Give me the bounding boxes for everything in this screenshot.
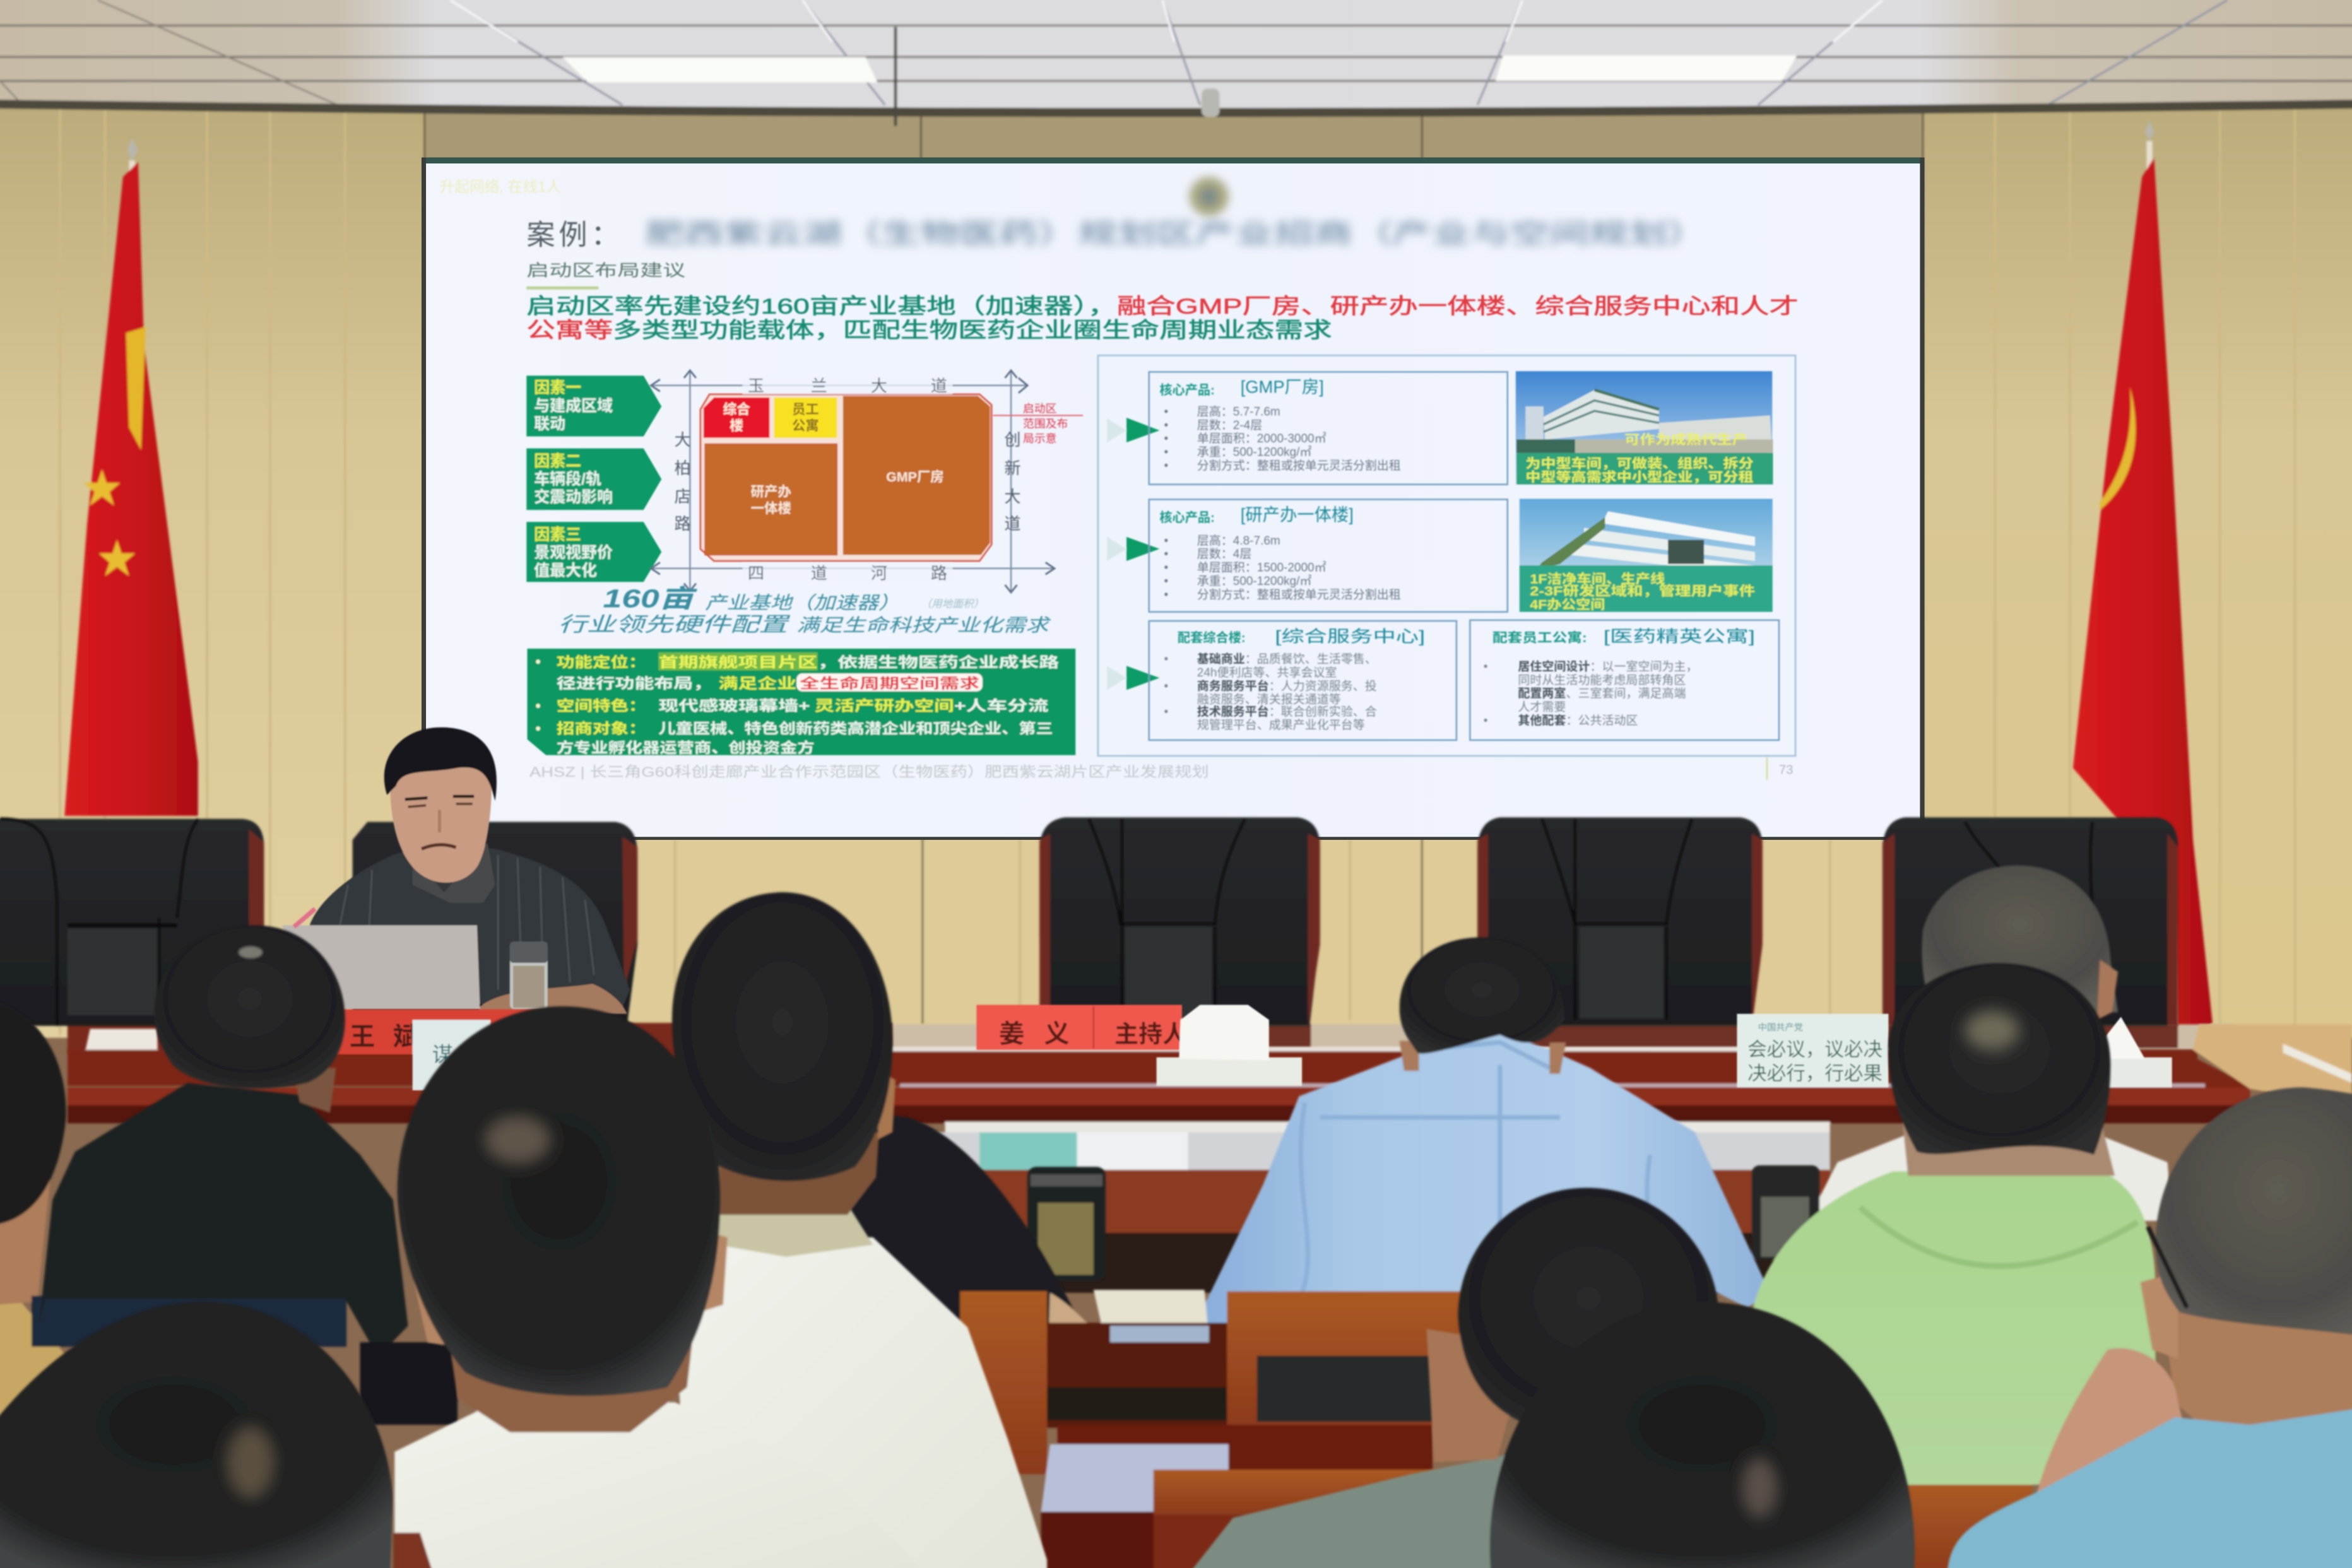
- card: R&D office building: 分割方式：整租或按单元灵活分割出租: [1197, 587, 1401, 601]
- card: staff apartment: •: [1484, 714, 1487, 728]
- name plate: Wang Bin: [331, 1010, 545, 1054]
- presenter face: [390, 750, 492, 883]
- card: R&D office building: •: [1164, 562, 1168, 575]
- card: service centre: •: [1164, 653, 1168, 666]
- card: staff apartment: 配套员工公寓:: [1492, 630, 1587, 645]
- green summary panel: 方专业孵化器运营商、创投资金方: [557, 740, 815, 756]
- card: service centre: •: [1164, 705, 1168, 719]
- site plan map: 综合: [723, 402, 750, 417]
- paper on table: [86, 1029, 158, 1050]
- factor tag three: [526, 522, 661, 582]
- man far left: [0, 994, 68, 1485]
- green summary panel: [528, 649, 1075, 756]
- card: GMP plant: 层高：5.7-7.6m: [1197, 404, 1280, 418]
- glass reflection: [915, 1133, 1830, 1170]
- chair front left: [820, 1473, 1007, 1568]
- card: service centre: 基础商业：品质餐饮、生活零售、: [1197, 652, 1377, 666]
- factor tag one: [526, 375, 661, 437]
- chair front centre: [1154, 1470, 2033, 1568]
- card: R&D office building: [研产办一体楼]: [1241, 505, 1354, 524]
- audience back rows: [0, 865, 2172, 1568]
- man in blue shirt: [1205, 938, 1770, 1354]
- card: service centre: 规管理平台、成果产业化平台等: [1197, 718, 1365, 732]
- card: GMP plant: 承重：500-1200kg/㎡: [1197, 445, 1311, 459]
- name plate: Wang Bin: 王 斌: [350, 1022, 418, 1051]
- slide headline: 启动区率先建设约160亩产业基地（加速器）， 融合GMP厂房、研产办一体楼、综合服务中心和人才: [526, 295, 1799, 319]
- site plan map: 河: [871, 563, 887, 582]
- site plan map: 路: [674, 514, 691, 533]
- room background: [0, 0, 2352, 1044]
- chair behind blue shirt: [1227, 1291, 1465, 1426]
- man with glasses on right: [1947, 1087, 2352, 1568]
- ceiling sensor: [1202, 88, 1219, 117]
- green summary panel: 灵活产研办空间: [815, 698, 954, 714]
- factor tag two: 交震动影响: [534, 488, 613, 506]
- presenter collar: [413, 843, 495, 903]
- card: service centre: 技术服务平台：联合创新实验、合: [1197, 704, 1377, 719]
- ceiling hanging rod: [895, 27, 896, 126]
- slogan card left: 谋: [432, 1044, 453, 1067]
- slogan card right: 会必议，议必决: [1747, 1038, 1882, 1060]
- ceiling: [0, 0, 2352, 108]
- green summary panel: 首期旗舰项目片区: [658, 654, 817, 671]
- card: GMP plant: •: [1164, 459, 1168, 473]
- site plan map: 道: [1004, 514, 1020, 533]
- page number: [1767, 757, 1793, 780]
- blurred title text: 肥西紫云湖（生物医药）规划区产业招商（产业与空间规划）: [645, 219, 1707, 249]
- card: GMP plant: •: [1164, 419, 1168, 432]
- slogan card right: 中国共产党: [1758, 1022, 1803, 1033]
- site plan map: 公寓: [792, 418, 819, 433]
- card: R&D office building: [1149, 499, 1508, 612]
- card: R&D office building: 层高：4.8-7.6m: [1197, 534, 1280, 548]
- chair beside white shirt: [960, 1291, 1047, 1474]
- site area caption: 160亩: [603, 584, 698, 613]
- card: service centre: 融资服务、清关报关通道等: [1197, 693, 1341, 707]
- wall under screen: [60, 108, 2295, 1044]
- table back surface: [68, 1023, 2235, 1053]
- card: GMP plant: 分割方式：整租或按单元灵活分割出租: [1197, 459, 1401, 473]
- site area caption: 产业基地（加速器）: [705, 593, 900, 613]
- projection screen: [422, 158, 1925, 840]
- card: GMP plant: •: [1164, 405, 1168, 418]
- slide subtitle: 启动区布局建议: [526, 261, 685, 280]
- name plate: centre: [976, 1005, 1186, 1050]
- photo: GMP building: 为中型车间，可做装、组织、拆分: [1525, 456, 1754, 471]
- green summary panel: ，依据生物医药企业成长路: [817, 654, 1059, 671]
- pink pen: [294, 909, 315, 927]
- site plan map: 大: [871, 376, 887, 395]
- card: R&D office building: •: [1164, 575, 1168, 588]
- card: staff apartment: [1470, 620, 1779, 740]
- factor tag one: 因素一: [534, 379, 581, 397]
- chair centre: [1039, 817, 1320, 1026]
- card: GMP plant: •: [1164, 432, 1168, 445]
- factor tag two: [526, 449, 661, 510]
- slide headline: [526, 295, 1799, 343]
- card: service centre: 配套综合楼:: [1178, 630, 1246, 645]
- slogan card right: 决必行，行必果: [1747, 1062, 1882, 1084]
- ceiling lights: [562, 56, 1797, 83]
- slide watermark: 升起网络, 在线1人: [439, 179, 561, 196]
- slogan card right: [1737, 1014, 1889, 1087]
- site plan map: 路: [931, 563, 947, 582]
- card: R&D office building: 承重：500-1200kg/㎡: [1197, 574, 1311, 588]
- card: service centre: •: [1164, 680, 1168, 693]
- leather chairs: [0, 817, 2178, 1026]
- factor tag two: 车辆段/轨: [534, 470, 601, 488]
- man in dark shirt: [840, 1110, 1113, 1388]
- man with spiky hair: [394, 1006, 927, 1568]
- page number: 73: [1779, 763, 1793, 777]
- man in front centre: [1490, 1302, 1915, 1568]
- card: GMP plant: •: [1164, 446, 1168, 459]
- chair stub: [393, 1533, 434, 1568]
- wood chairs: [820, 1291, 2033, 1568]
- chair far right: [1882, 817, 2178, 1026]
- factor tag three: 景观视野价: [534, 544, 613, 562]
- man with grey hair: [1807, 865, 2172, 1221]
- factor tag two: 因素二: [534, 452, 581, 470]
- site area caption: （用地面积）: [921, 598, 984, 610]
- presenter torso: [309, 844, 630, 1008]
- green summary panel: 满足企业: [719, 675, 796, 692]
- card: staff apartment: 居住空间设计：以一室空间为主，: [1518, 659, 1698, 673]
- rear desk and papers: [1047, 1290, 1234, 1428]
- card: R&D office building: 核心产品:: [1159, 510, 1215, 525]
- card: service centre: 24h便利店等、共享会议室: [1197, 666, 1337, 680]
- card: staff apartment: 同时从生活功能考虑局部转角区: [1518, 673, 1686, 687]
- site plan map: [651, 370, 1083, 592]
- card: R&D office building: •: [1164, 548, 1168, 561]
- tissue box right: [2103, 1017, 2172, 1087]
- photo: terraced building: 1F洁净车间、生产线: [1530, 572, 1665, 587]
- card: R&D office building: 单层面积：1500-2000㎡: [1197, 560, 1327, 575]
- left flag: [64, 138, 198, 816]
- slide right outer frame: [1098, 355, 1795, 756]
- green summary panel: •: [536, 720, 541, 736]
- man in black shirt: [32, 926, 458, 1425]
- left wood wall: [0, 108, 425, 1038]
- site area caption: [558, 584, 1051, 636]
- site area caption: 满足生命科技产业化需求: [796, 616, 1051, 636]
- site plan map: 新: [1004, 459, 1020, 478]
- card: GMP plant: 层数：2-4层: [1197, 418, 1262, 432]
- card: R&D office building: •: [1164, 534, 1168, 548]
- site plan map: 员工: [792, 402, 819, 417]
- site plan map: 道: [931, 376, 947, 395]
- chair far left: [0, 819, 264, 1026]
- slogan card left: [413, 1020, 490, 1090]
- flask right: [1752, 1165, 1819, 1260]
- green summary panel: 径进行功能布局，: [557, 675, 712, 692]
- site plan map: 创: [1004, 430, 1020, 449]
- conference table: [68, 1024, 2352, 1293]
- arrow markers: [1107, 418, 1159, 690]
- factor tag three: 值最大化: [534, 562, 597, 580]
- right wood wall: [1923, 108, 2352, 1038]
- presenter hand: [478, 984, 627, 1014]
- site plan map: 道: [811, 563, 827, 582]
- name plate: centre: 姜 义: [999, 1019, 1070, 1048]
- card: R&D office building: •: [1164, 588, 1168, 601]
- factor tag one: 联动: [534, 415, 565, 433]
- factor tag one: 与建成区域: [534, 397, 613, 415]
- dark flask on table: [1027, 1167, 1106, 1281]
- site plan map: 玉: [748, 376, 764, 395]
- site plan map: 柏: [674, 459, 691, 478]
- arm of man in dark shirt: [1047, 1293, 1113, 1388]
- site plan map: 大: [1004, 487, 1020, 506]
- site plan map: 兰: [811, 376, 827, 395]
- card: service centre: 商务服务平台：人力资源服务、投: [1197, 678, 1377, 693]
- site area caption: 行业领先硬件配置: [558, 613, 791, 636]
- factor tag three: 因素三: [534, 526, 581, 544]
- card: GMP plant: [1149, 372, 1508, 485]
- presenter features: [405, 796, 474, 849]
- site plan map: 大: [674, 430, 691, 449]
- water flask: [510, 942, 548, 1010]
- man in green shirt: [1751, 963, 2156, 1485]
- glossy desk top: [1041, 1444, 1229, 1512]
- site plan map: 一体楼: [751, 501, 791, 516]
- green summary panel: •: [536, 698, 541, 714]
- site plan map: GMP厂房: [886, 469, 944, 485]
- card: staff apartment: •: [1484, 660, 1487, 673]
- card: GMP plant: 核心产品:: [1159, 382, 1215, 398]
- card: GMP plant: [GMP厂房]: [1241, 377, 1324, 397]
- photo: terraced building: 4F办公空间: [1530, 598, 1605, 612]
- dark desk base: [1058, 1425, 1433, 1470]
- green summary panel: 功能定位：: [557, 654, 646, 671]
- audience front rows: [0, 892, 2352, 1568]
- man in grey jacket: [1188, 1188, 1719, 1568]
- chair right of centre: [1477, 817, 1763, 1026]
- green summary panel: 现代感玻璃幕墙+: [658, 698, 810, 714]
- card: GMP plant: 单层面积：2000-3000㎡: [1197, 431, 1327, 445]
- tissue box centre: [1157, 1005, 1302, 1086]
- slide title: 案例：: [526, 218, 620, 251]
- ceiling edge: [0, 99, 2352, 117]
- green summary panel: 招商对象：: [557, 720, 646, 736]
- card: service centre: [1149, 621, 1457, 740]
- slide logo: [1190, 177, 1229, 216]
- green summary panel: +人车分流: [954, 698, 1049, 714]
- site plan map: 店: [674, 487, 691, 506]
- site plan map: 启动区: [1023, 403, 1056, 415]
- chair behind speaker: [353, 822, 637, 1026]
- site plan map: 楼: [730, 418, 743, 433]
- green summary panel: 儿童医械、特色创新药类高潜企业和顶尖企业、第三: [658, 720, 1053, 736]
- card: staff apartment: [医药精英公寓]: [1604, 627, 1755, 645]
- upper wood band: [425, 108, 1923, 159]
- site plan map: 四: [748, 563, 764, 582]
- table right corner: [2193, 1024, 2352, 1107]
- man in front bottom left: [0, 1302, 393, 1568]
- card: staff apartment: 人才需要: [1518, 700, 1566, 714]
- photo: GMP building: 可作为成熟代生产: [1624, 432, 1747, 447]
- laptop: [282, 926, 480, 1010]
- card: R&D office building: 层数：4层: [1197, 547, 1251, 561]
- photo: GMP building: [1516, 371, 1773, 485]
- right flag: [2073, 120, 2213, 1050]
- name plates and tissue boxes: [331, 1005, 2172, 1090]
- slide headline: 公寓等 多类型功能载体，匹配生物医药企业圈生命周期业态需求: [526, 319, 1332, 343]
- presenter hair: [384, 728, 497, 801]
- slide footer: AHSZ | 长三角G60科创走廊产业合作示范园区（生物医药）肥西紫云湖片区产业发展规划: [529, 764, 1209, 780]
- name plate: centre: 主持人: [1114, 1022, 1186, 1048]
- site plan map: 研产办: [751, 485, 791, 500]
- green summary panel: 全生命周期空间需求: [800, 675, 979, 692]
- card: staff apartment: 其他配套：公共活动区: [1518, 714, 1638, 728]
- photo: GMP building: 中型等高需求中小型企业，可分租: [1525, 469, 1754, 485]
- presenter: [282, 728, 630, 1014]
- green summary panel: 空间特色：: [557, 698, 646, 714]
- photo: terraced building: 2-3F研发区域和，管理用户事件: [1530, 584, 1755, 599]
- man in white polo: [672, 892, 1047, 1568]
- site plan map: 局示意: [1023, 432, 1056, 445]
- card: staff apartment: 配置两室、三室套间，满足高端: [1518, 686, 1686, 700]
- card: service centre: [综合服务中心]: [1275, 627, 1425, 645]
- green summary panel: •: [536, 654, 541, 670]
- photo: terraced building: [1520, 499, 1773, 612]
- site plan map: 范围及布: [1023, 417, 1068, 430]
